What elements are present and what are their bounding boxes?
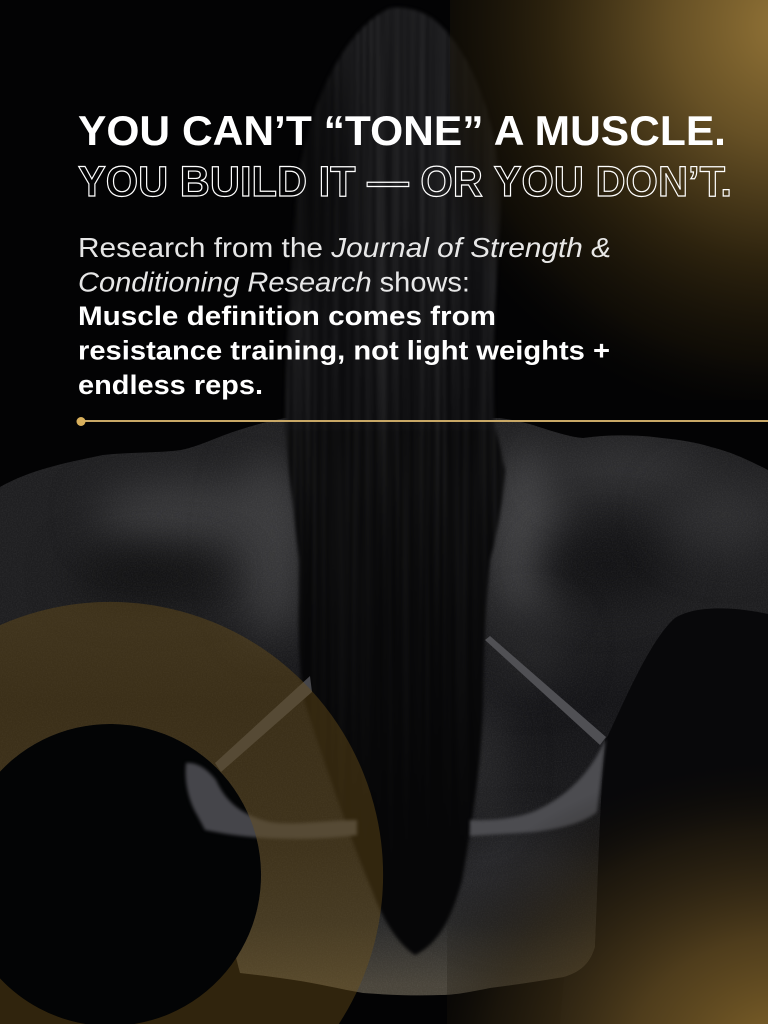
bold line two: resistance training, not light weights + <box>78 336 610 366</box>
shadow inside ring hole <box>0 724 261 1024</box>
heading <box>78 107 732 206</box>
left bra strap <box>215 676 312 772</box>
right bra strap <box>485 636 606 745</box>
divider line with dot <box>76 417 768 426</box>
body text <box>78 232 611 400</box>
gold ring <box>0 602 383 1024</box>
right bra band <box>470 738 606 836</box>
intro line one: Research from the Journal of Strength & <box>78 232 611 263</box>
heading line two: outlined: YOU BUILD IT — OR YOU DON’T. <box>78 158 732 206</box>
left bra band <box>185 763 357 839</box>
gold gradient panel: top right <box>450 0 768 400</box>
gold gradient panel: bottom right <box>447 600 768 1024</box>
bold line one: Muscle definition comes from <box>78 301 496 331</box>
dark right arm <box>560 608 768 1024</box>
skin with shoulder and torso shading <box>0 410 768 1010</box>
heading line one: YOU CAN’T “TONE” A MUSCLE. <box>78 107 726 154</box>
head and hair <box>285 6 506 956</box>
intro line two: Conditioning Research shows: <box>78 266 470 298</box>
bold line three: endless reps. <box>78 370 263 400</box>
